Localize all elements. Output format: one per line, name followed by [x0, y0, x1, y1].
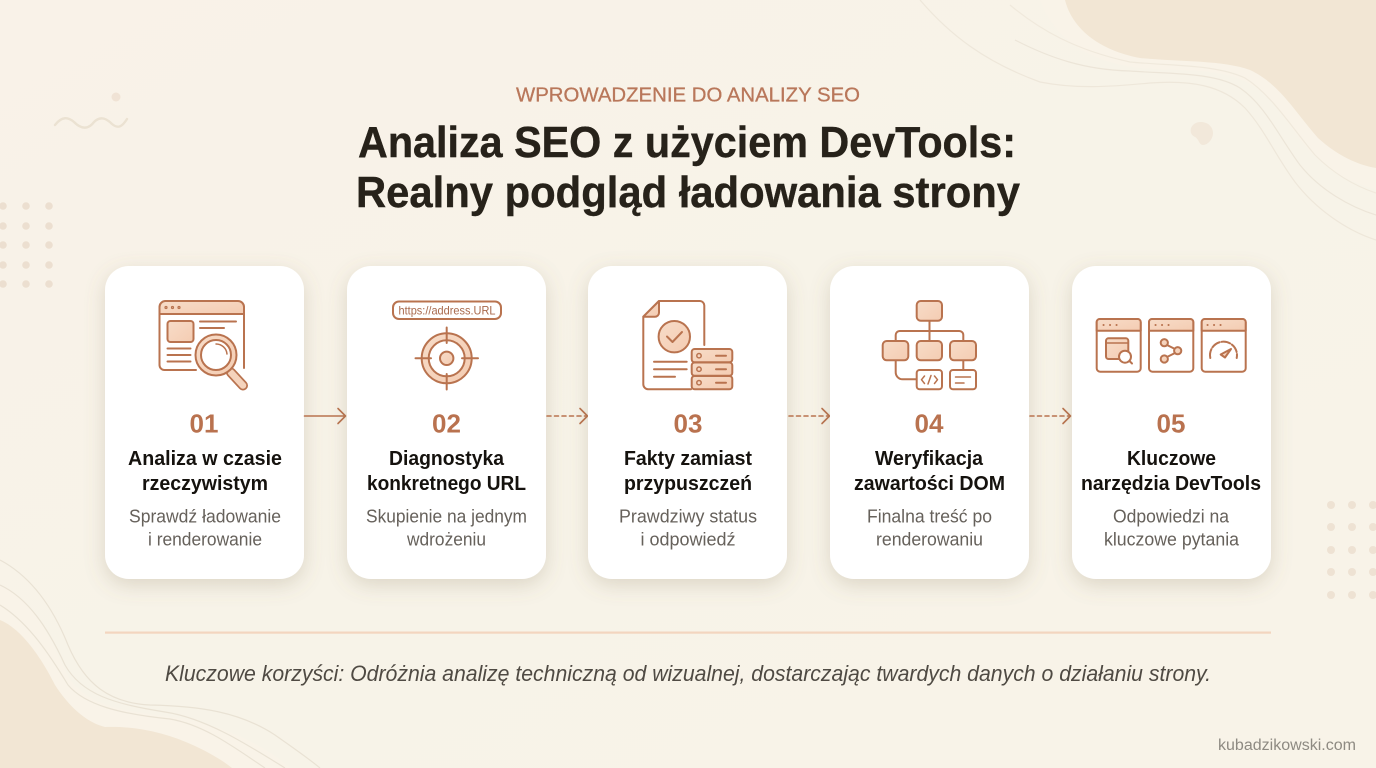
step description	[867, 506, 992, 550]
icon: DOM tree	[883, 301, 976, 389]
step description	[366, 506, 527, 550]
step description: Sprawdź ładowanie	[129, 506, 281, 526]
panel: step 04	[830, 266, 1029, 579]
step description: renderowaniu	[876, 530, 983, 550]
step number: 01	[190, 409, 218, 439]
step description	[1104, 506, 1240, 550]
decorative squiggle	[55, 118, 127, 128]
target	[416, 328, 478, 390]
step title	[624, 448, 752, 495]
step number: 05	[1157, 409, 1185, 439]
icon: browser window with magnifier	[159, 301, 244, 386]
step title: narzędzia DevTools	[1081, 473, 1261, 495]
step title: Diagnostyka	[389, 448, 505, 470]
step title	[1081, 448, 1261, 495]
step title	[854, 448, 1005, 495]
decorative blob: bottom left	[0, 560, 320, 768]
title: Realny podgląd ładowania strony	[356, 168, 1020, 217]
panel: step 01	[105, 266, 304, 579]
step description: kluczowe pytania	[1104, 530, 1240, 550]
step description: Odpowiedzi na	[1113, 506, 1230, 526]
step title: konkretnego URL	[367, 473, 526, 495]
window: elements search	[1097, 319, 1141, 372]
decorative blob: top right	[920, 0, 1376, 240]
step title: Weryfikacja	[875, 448, 984, 470]
title: Analiza SEO z użyciem DevTools:	[358, 118, 1016, 167]
eyebrow heading: WPROWADZENIE DO ANALIZY SEO	[516, 84, 860, 106]
window: share nodes	[1149, 319, 1193, 372]
step description	[619, 506, 757, 550]
title	[356, 118, 1020, 217]
step title: zawartości DOM	[854, 473, 1005, 495]
step title: Kluczowe	[1127, 448, 1216, 470]
divider	[105, 632, 1271, 634]
step title: Analiza w czasie	[128, 448, 282, 470]
step description: i renderowanie	[148, 530, 262, 550]
arrow: 04 to 05	[1030, 408, 1070, 424]
decorative drop	[1191, 122, 1213, 145]
step description	[129, 506, 281, 550]
step number: 03	[674, 409, 702, 439]
decorative dots: right	[1327, 501, 1376, 599]
step title: rzeczywistym	[142, 473, 268, 495]
icon: three DevTools windows	[1097, 319, 1246, 372]
step number: 04	[915, 409, 944, 439]
step title	[367, 448, 526, 495]
watermark: kubadzikowski.com	[1218, 737, 1356, 754]
step description: Prawdziwy status	[619, 506, 757, 526]
step title	[128, 448, 282, 495]
icon: document with check and server	[643, 301, 732, 389]
arrow: 03 to 04	[789, 408, 830, 424]
panel: step 05	[1072, 266, 1271, 579]
decorative dots: left	[0, 202, 53, 288]
arrow: 01 to 02	[304, 408, 346, 424]
step title: przypuszczeń	[624, 473, 752, 495]
key benefits text: Kluczowe korzyści: Odróżnia analizę techniczną od wizualnej, dostarczając twardych danych o działaniu strony.	[165, 661, 1211, 686]
arrow: 02 to 03	[547, 408, 588, 424]
step title: Fakty zamiast	[624, 448, 752, 470]
step description: Finalna treść po	[867, 506, 992, 526]
icon: URL bar with target	[393, 302, 501, 390]
decorative small dot	[112, 92, 120, 102]
URL pill: https://address.URL	[398, 304, 496, 318]
panel: step 02	[347, 266, 546, 579]
step number: 02	[432, 409, 461, 439]
step description: wdrożeniu	[406, 530, 486, 550]
panel: step 03	[588, 266, 787, 579]
window: speed gauge	[1202, 319, 1246, 372]
step description: Skupienie na jednym	[366, 506, 527, 526]
step description: i odpowiedź	[640, 530, 736, 550]
